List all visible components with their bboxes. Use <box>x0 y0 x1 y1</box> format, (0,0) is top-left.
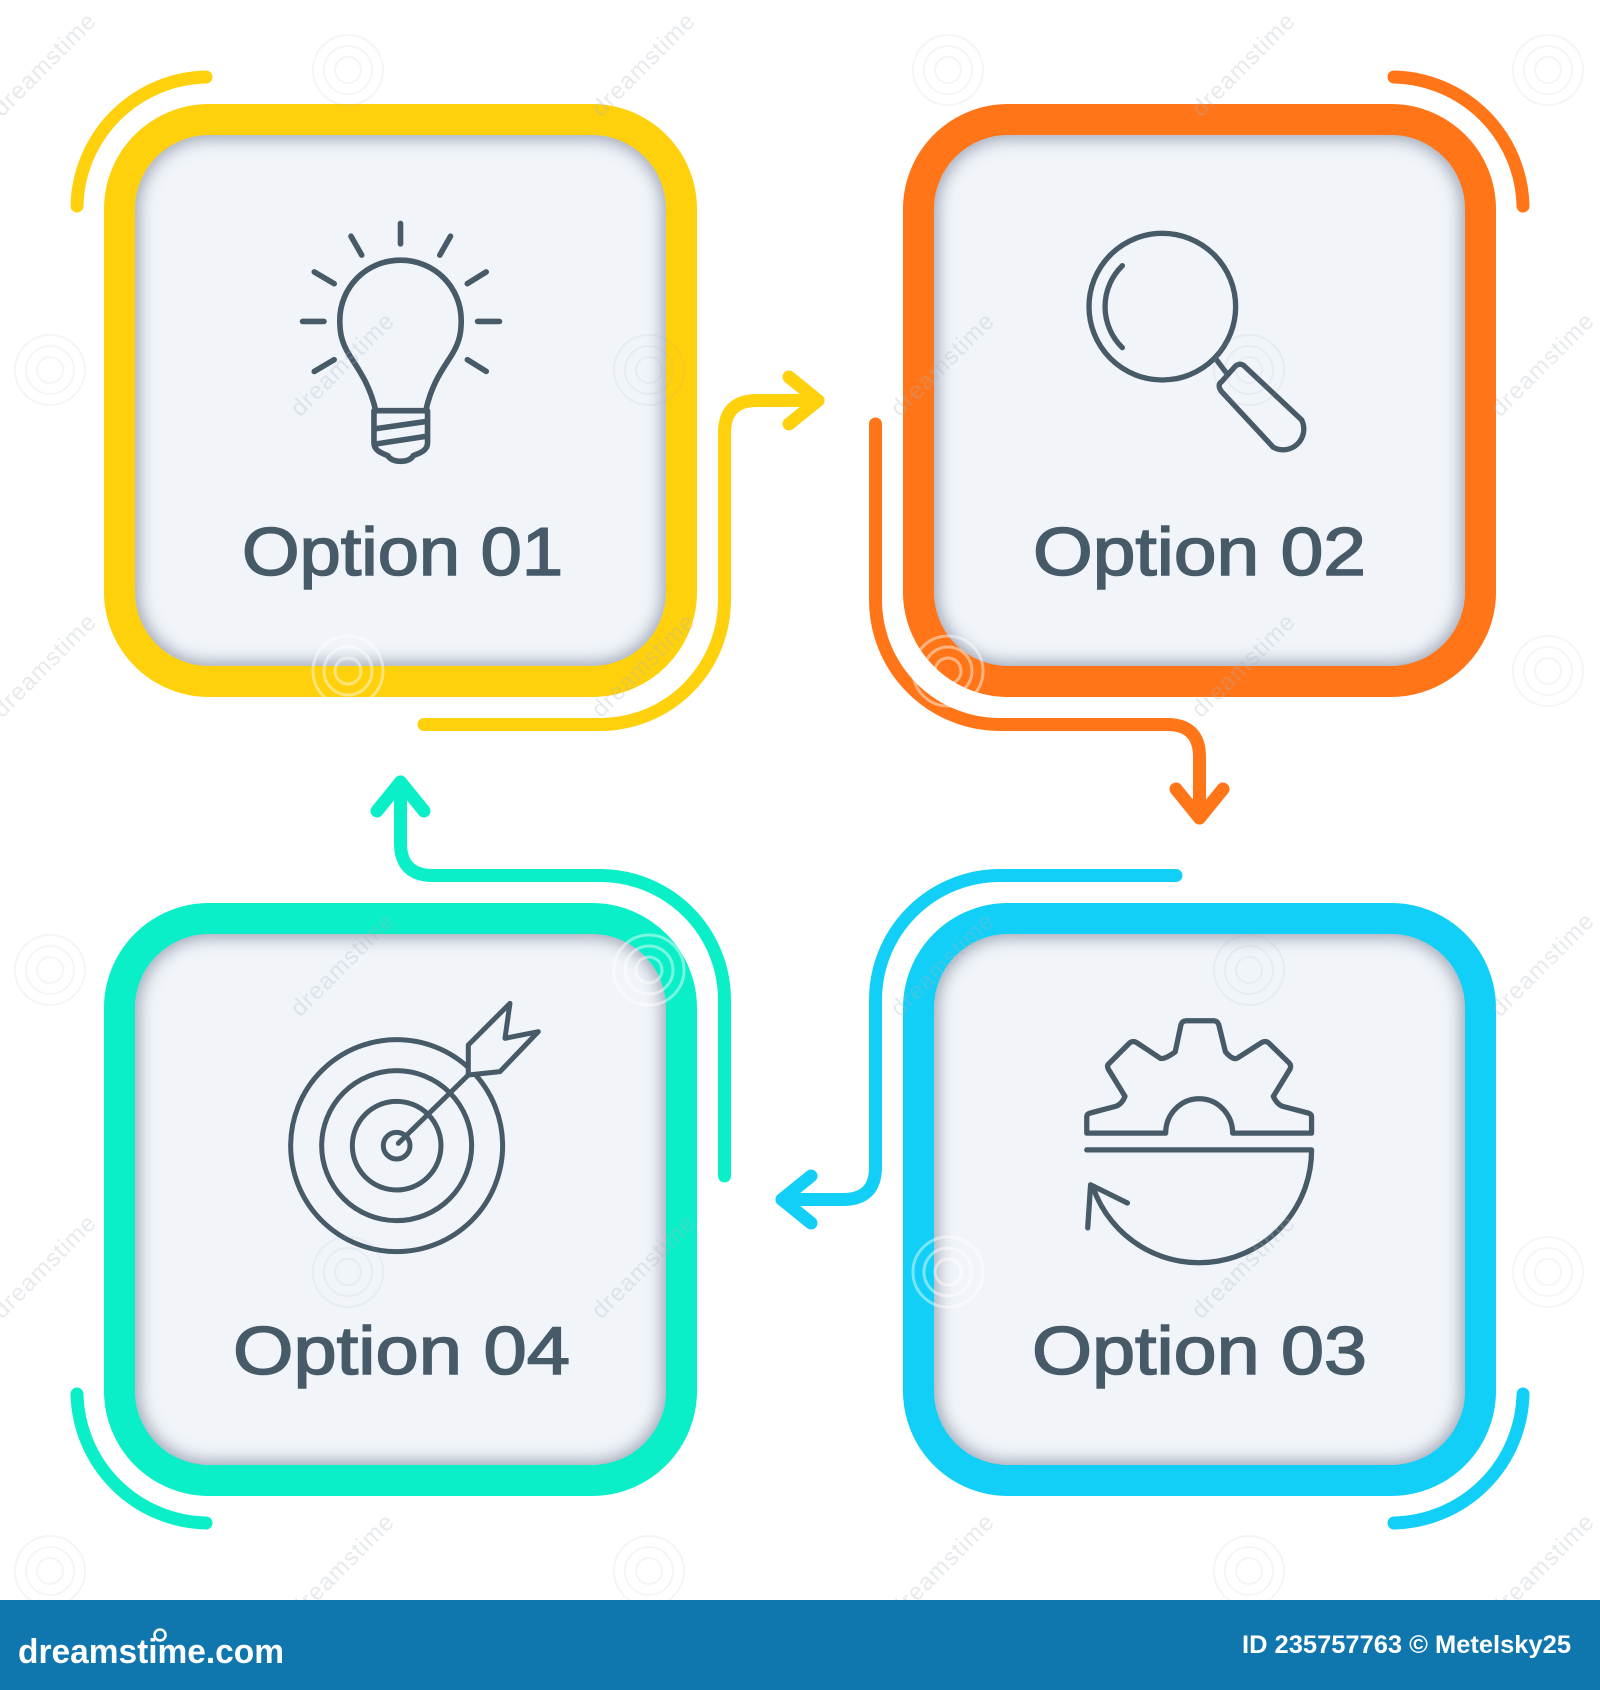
icon: gear with rotation arrow <box>1087 1021 1312 1263</box>
label: Option 04: Option 04 <box>233 1313 570 1389</box>
watermark text: dreamstime <box>1485 307 1600 422</box>
watermark text: dreamstime <box>1485 907 1600 1022</box>
watermark text: dreamstime <box>285 907 400 1022</box>
icon: light bulb <box>303 223 499 461</box>
icon: magnifying glass <box>1089 233 1304 450</box>
corner arc: option 04 <box>77 1394 206 1523</box>
arrow: option 04 to option 01 <box>377 782 724 1176</box>
footer logo: dreamstime.com: dreamstime.com <box>18 1633 284 1671</box>
footer bar <box>0 1600 1600 1690</box>
panel: option 02 <box>903 104 1496 697</box>
watermark text: dreamstime <box>885 907 1000 1022</box>
arrow: option 01 to option 02 <box>424 377 818 724</box>
watermark text: dreamstime <box>1186 608 1301 723</box>
icon: target with arrow <box>291 1003 538 1252</box>
watermark text: dreamstime <box>285 307 400 422</box>
panel: option 01 <box>104 104 697 697</box>
corner arc: option 02 <box>1394 77 1523 206</box>
watermark text: dreamstime <box>1485 1508 1600 1623</box>
corner arc: option 03 <box>1394 1394 1523 1523</box>
watermark text: dreamstime <box>1186 1209 1301 1324</box>
arrow: option 02 to option 03 <box>876 424 1223 818</box>
panel: option 04 <box>104 903 697 1496</box>
watermark text: dreamstime <box>885 307 1000 422</box>
footer credit: ID 235757763 © Metelsky25 <box>1242 1631 1571 1659</box>
arrow: option 03 to option 04 <box>782 876 1176 1223</box>
panel: option 03 <box>903 903 1496 1496</box>
watermark text: dreamstime <box>285 1508 400 1623</box>
watermark text: dreamstime <box>1186 7 1301 122</box>
watermark text: dreamstime <box>586 608 701 723</box>
watermark text: dreamstime <box>885 1508 1000 1623</box>
label: Option 03: Option 03 <box>1032 1313 1367 1389</box>
corner arc: option 01 <box>77 77 206 206</box>
watermark text: dreamstime <box>586 7 701 122</box>
label: Option 02: Option 02 <box>1033 514 1366 590</box>
label: Option 01: Option 01 <box>242 514 563 590</box>
watermark text: dreamstime <box>586 1209 701 1324</box>
